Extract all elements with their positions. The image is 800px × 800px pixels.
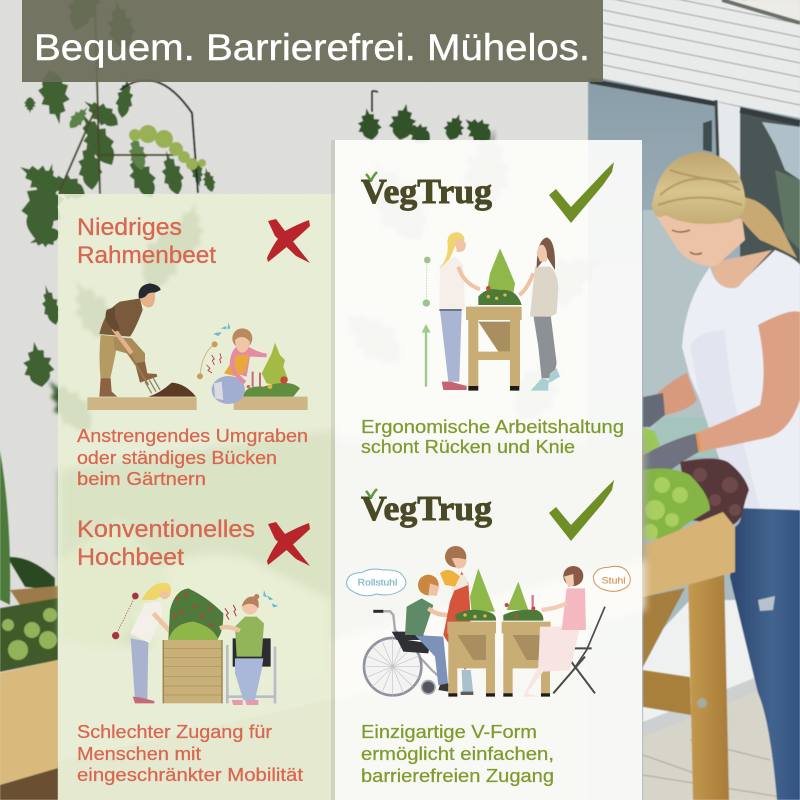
callout: Rollstuhl [347, 569, 406, 596]
left box with lettuce [7, 557, 55, 590]
plant shadows in centre panel [331, 124, 614, 431]
text: Einzigartige V-Form: Einzigartige V-Form [361, 722, 537, 742]
illustration: two women at VegTrug bed [422, 232, 560, 391]
terrace floor behind panels [0, 640, 590, 800]
tomato plant [13, 0, 218, 390]
gardener arms and gloves [696, 311, 800, 452]
plant seen through left panel [36, 198, 212, 441]
title banner [22, 0, 603, 82]
roller shutter [590, 0, 800, 118]
logo: VegTrug: VegTrug [361, 489, 492, 528]
callout: Stuhl: Stuhl [602, 575, 626, 585]
illustration: conventional raised bed with standing woman and wheelchair user [112, 583, 278, 705]
window frame [717, 102, 740, 180]
text: Menschen mit: Menschen mit [77, 744, 201, 764]
blonde hair and ponytail [738, 197, 797, 258]
jeans [730, 507, 800, 800]
callout: Rollstuhl: Rollstuhl [358, 578, 397, 588]
text: Schlechter Zugang für: Schlechter Zugang für [77, 722, 272, 742]
heading line 2: Rahmenbeet [77, 242, 216, 269]
title: Bequem. Barrierefrei. Mühelos. [34, 27, 590, 68]
heading line 2: Hochbeet [77, 544, 184, 571]
heading: Konventionelles Hochbeet: Konventionelles [77, 516, 255, 543]
text: Anstrengendes Umgraben: Anstrengendes Umgraben [77, 426, 308, 446]
icon: green check mark [549, 480, 614, 541]
text: Ergonomische Arbeitshaltung: Ergonomische Arbeitshaltung [361, 417, 624, 437]
callout: Stuhl [593, 566, 630, 591]
wooden raised bed [643, 588, 685, 667]
right window with trees [740, 108, 800, 300]
panel shadow between panels [331, 140, 335, 800]
text: oder ständiges Bücken: oder ständiges Bücken [77, 448, 277, 468]
panel: conventional beds (left) [58, 194, 335, 800]
icon: green check mark [549, 162, 614, 223]
text: barrierefreien Zugang: barrierefreien Zugang [361, 766, 554, 786]
text: ermöglicht einfachen,: ermöglicht einfachen, [361, 744, 554, 764]
text: eingeschränkter Mobilität: eingeschränkter Mobilität [77, 765, 303, 785]
second plant above centre panel [372, 91, 378, 112]
icon: red cross [267, 219, 310, 263]
heading: Niedriges Rahmenbeet: Niedriges [77, 214, 182, 241]
text: schont Rücken und Knie: schont Rücken und Knie [361, 437, 575, 457]
panel: VegTrug beds (centre) [335, 140, 642, 800]
illustration: wheelchair user, standing and seated women at two VegTrug beds [347, 546, 630, 697]
illustration: man digging and woman bending at low bed [87, 283, 308, 410]
window glass [588, 78, 800, 800]
lettuce seen through panels [60, 430, 645, 700]
lettuce [680, 458, 749, 526]
neck and face [712, 250, 772, 288]
floor behind the bed [643, 600, 760, 722]
text: beim Gärtnern: beim Gärtnern [77, 469, 206, 489]
t-shirt [682, 250, 800, 510]
icon: red cross [267, 522, 310, 566]
logo: VegTrug: VegTrug [361, 172, 492, 211]
